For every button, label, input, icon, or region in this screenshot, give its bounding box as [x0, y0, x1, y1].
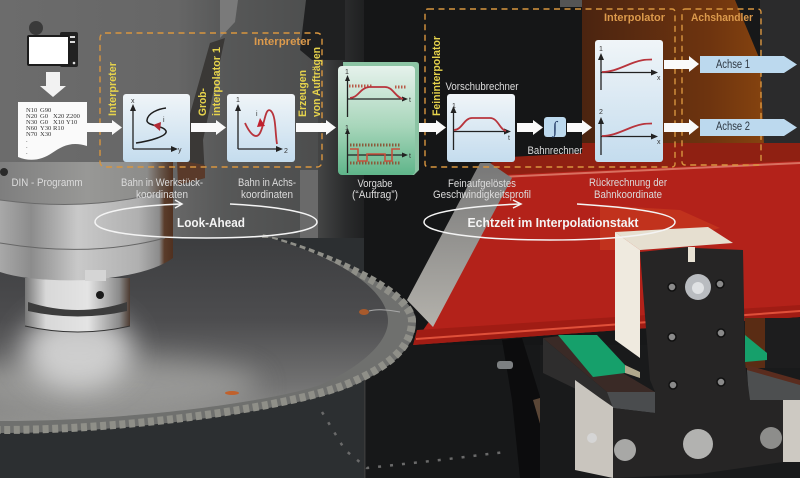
panel: Bahn in Werkstückkoordinaten chart — [123, 94, 190, 162]
caption: Feinaufgelöstes Geschwindigkeitsprofil — [433, 178, 531, 201]
label: Look-Ahead: Look-Ahead — [177, 216, 245, 230]
document: DIN program: Y10 — [66, 119, 78, 126]
caption: Vorgabe (Auftrag) — [352, 178, 398, 201]
document: DIN program — [18, 102, 87, 160]
panel: Bahn in Achskoordinaten chart — [227, 94, 295, 162]
caption: Vorgabe (Auftrag): (“Auftrag”) — [352, 189, 398, 201]
rotated label: Feininterpolator: Feininterpolator — [431, 35, 443, 116]
panel: Bahn in Achskoordinaten chart: 2 — [284, 148, 288, 155]
document: DIN program: X30 — [40, 131, 52, 138]
panel: Vorschubrechner chart — [447, 94, 515, 162]
document: DIN program: . — [26, 137, 28, 144]
output: Achse 2 — [700, 119, 797, 136]
output: Achse 1 — [700, 56, 797, 73]
rotated label: Grob-interpolator 1 — [197, 47, 223, 116]
caption: Bahn in Achskoordinaten: Bahn in Achs- — [238, 177, 296, 189]
caption: Bahn in Werkstückkoordinaten: koordinaten — [136, 189, 188, 201]
rotated label: Erzeugen von Aufträgen — [297, 47, 323, 117]
document: DIN program: N20 — [26, 113, 38, 120]
panel: Bahn in Werkstückkoordinaten chart: i — [163, 117, 165, 124]
document: DIN program: N70 — [26, 131, 38, 138]
dashed frame: Achshandler — [682, 9, 761, 165]
icon: integral box: ∫ — [552, 118, 559, 138]
panel: Vorgabe card: 1 — [345, 69, 349, 76]
caption: Rückrechnung der Bahnkoordinate — [589, 177, 667, 201]
document: DIN program: G0 — [40, 113, 49, 120]
document: DIN program: Z200 — [66, 113, 81, 120]
panel: Bahn in Werkstückkoordinaten chart: x — [131, 98, 135, 105]
panel: Interpolator charts: 1 — [599, 46, 603, 53]
caption: Bahn in Werkstückkoordinaten — [121, 177, 203, 201]
heading: Achshandler: Achshandler — [691, 12, 754, 24]
loop arrow: Echtzeit — [424, 200, 675, 240]
rotated label: Grob-interpolator 1: interpolator 1 — [211, 47, 223, 116]
document: DIN program: . — [26, 149, 28, 156]
caption: Feinaufgelöstes Geschwindigkeitsprofil: Feinaufgelöstes — [448, 178, 516, 190]
panel: Interpolator charts: x — [657, 75, 661, 82]
rotated label: Grob-interpolator 1: Grob- — [197, 88, 209, 116]
panel: Bahn in Achskoordinaten chart: 1 — [236, 97, 240, 104]
document: DIN program: X10 — [53, 119, 65, 126]
dashed frame: Feininterpolator — [425, 9, 675, 167]
label: Echtzeit im Interpolationstakt: Echtzeit im Interpolationstakt — [468, 216, 639, 230]
document: DIN program: N10 — [26, 107, 38, 114]
caption: Vorschubrechner: Vorschubrechner — [446, 81, 519, 93]
document: DIN program: N60 — [26, 125, 38, 132]
document: DIN program: Y30 — [40, 125, 52, 132]
spindle — [0, 162, 173, 332]
output: Achse 1: Achse 1 — [716, 59, 750, 71]
dashed frame: Interpreter — [100, 33, 322, 167]
panel: Interpolator charts: 2 — [599, 109, 603, 116]
loop arrow: Look-Ahead — [95, 200, 317, 238]
panel: Bahn in Werkstückkoordinaten chart: y — [178, 147, 182, 154]
icon: integral box — [544, 117, 566, 138]
output: Achse 2: Achse 2 — [716, 121, 750, 133]
panel: Vorschubrechner chart: 1 — [452, 103, 456, 110]
caption: Bahn in Achskoordinaten — [238, 177, 296, 201]
panel: Vorgabe card: t — [409, 153, 411, 160]
document: DIN program: . — [26, 143, 28, 150]
panel: Interpolator charts — [595, 40, 663, 162]
panel: Vorgabe card — [338, 62, 419, 175]
caption: DIN - Programm: DIN - Programm — [12, 177, 82, 189]
document: DIN program: N30 — [26, 119, 38, 126]
panel: Vorschubrechner chart: t — [508, 135, 510, 142]
document: DIN program: G90 — [40, 107, 52, 114]
document: DIN program: R10 — [53, 125, 65, 132]
panel: Vorgabe card: t — [409, 97, 411, 104]
document: DIN program: X20 — [53, 113, 65, 120]
caption: Vorgabe (Auftrag): Vorgabe — [358, 178, 392, 190]
heading: Interpolator: Interpolator — [604, 12, 666, 24]
panel: Bahn in Achskoordinaten chart: i — [256, 111, 258, 118]
caption: Bahnrechner: Bahnrechner — [528, 145, 583, 157]
caption: Rückrechnung der Bahnkoordinate: Bahnkoordinate — [594, 189, 662, 201]
rotated label: Erzeugen von Aufträgen: Erzeugen — [297, 70, 309, 117]
heading: Interpreter: Interpreter — [254, 36, 312, 48]
caption: Bahn in Achskoordinaten: koordinaten — [241, 189, 293, 201]
panel: Vorgabe card: 1 — [345, 125, 349, 132]
rotated label: Erzeugen von Aufträgen: von Aufträgen — [311, 47, 323, 117]
caption: Bahn in Werkstückkoordinaten: Bahn in Werkstück- — [121, 177, 203, 189]
caption: Rückrechnung der Bahnkoordinate: Rückrechnung der — [589, 177, 667, 189]
panel: Interpolator charts: x — [657, 139, 661, 146]
arrow: computer to program — [40, 72, 66, 97]
document: DIN program: G0 — [40, 119, 49, 126]
saw blade — [0, 238, 416, 433]
flow arrows — [87, 56, 699, 135]
rotated label: Interpreter: Interpreter — [107, 61, 119, 116]
machine parts: white block, rails and mounting plate — [543, 227, 800, 478]
icon: computer — [27, 21, 78, 67]
caption: Feinaufgelöstes Geschwindigkeitsprofil: Geschwindigkeitsprofil — [433, 189, 531, 201]
